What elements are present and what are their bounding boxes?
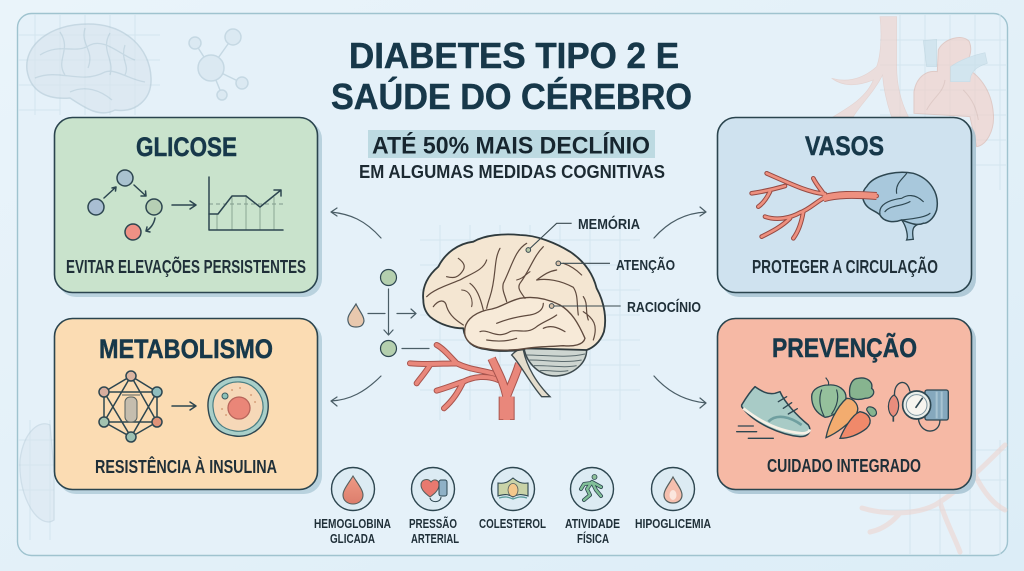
chart: glucose line xyxy=(209,177,285,230)
title xyxy=(331,35,692,117)
decorative faded molecule xyxy=(189,29,248,100)
heading: metabolismo: METABOLISMO xyxy=(99,334,273,364)
icon: atividade fisica xyxy=(570,468,614,510)
icon: hipoglicemia xyxy=(652,468,694,510)
label: atencao: ATENÇÃO xyxy=(616,256,675,274)
panel: glicose xyxy=(54,118,322,297)
icon: vegetables xyxy=(812,378,876,438)
caption: prevencao: CUIDADO INTEGRADO xyxy=(767,456,921,476)
icon: shoe xyxy=(737,387,810,438)
title: SAÚDE DO CÉREBRO xyxy=(331,75,692,117)
arrow: to glicose xyxy=(331,208,381,238)
label: colesterol: COLESTEROL xyxy=(479,516,546,531)
decorative faded heart and vessels, top right xyxy=(832,17,994,147)
cerebellum xyxy=(524,347,587,376)
panel: metabolismo xyxy=(54,318,322,494)
artery xyxy=(410,345,519,420)
icon: pressao arterial xyxy=(412,468,454,510)
title: DIABETES TIPO 2 E xyxy=(349,35,679,76)
pathway diagram xyxy=(348,270,429,356)
decorative faded heart, bottom left xyxy=(20,424,54,522)
label: pressao arterial: ARTERIAL xyxy=(411,531,459,546)
caption: vasos: PROTEGER A CIRCULAÇÃO xyxy=(752,256,938,277)
panel: vasos xyxy=(718,118,976,297)
label: hemoglobina glicada: HEMOGLOBINA xyxy=(314,516,391,531)
icon: glucose cycle xyxy=(88,170,196,240)
panel: prevencao xyxy=(718,318,976,494)
label: hemoglobina glicada xyxy=(314,516,391,546)
subtitle: EM ALGUMAS MEDIDAS COGNITIVAS xyxy=(359,162,665,182)
icon: blood pressure monitor xyxy=(888,382,948,431)
arrow: to vasos xyxy=(654,207,706,238)
label: hemoglobina glicada: GLICADA xyxy=(330,531,375,546)
label: memoria: MEMÓRIA xyxy=(578,215,640,233)
arrow: to metabolismo xyxy=(331,376,381,406)
icon: insulin network xyxy=(99,371,162,442)
decorative faded brain, top left xyxy=(27,24,151,113)
label: pressao arterial: PRESSÃO xyxy=(409,516,457,531)
icon: vessels to brain xyxy=(752,172,937,240)
decorative faded vessels, bottom right xyxy=(862,445,1005,552)
arrow xyxy=(172,402,196,410)
label: hipoglicemia: HIPOGLICEMIA xyxy=(635,516,711,531)
label: raciocinio: RACIOCÍNIO xyxy=(627,299,701,316)
icon: cell xyxy=(208,377,268,436)
caption: metabolismo: RESISTÊNCIA À INSULINA xyxy=(95,456,277,477)
label: pressao arterial xyxy=(409,516,459,546)
heading: vasos: VASOS xyxy=(805,131,884,161)
caption: glicose: EVITAR ELEVAÇÕES PERSISTENTES xyxy=(66,256,306,277)
label: atividade fisica xyxy=(565,516,620,546)
label: atividade fisica: ATIVIDADE xyxy=(565,516,620,531)
icon: colesterol xyxy=(492,468,534,510)
icon row: indicators xyxy=(314,468,711,546)
arrow: to prevencao xyxy=(654,376,706,408)
brain xyxy=(423,234,605,351)
highlighted statistic: ATÉ 50% MAIS DECLÍNIO xyxy=(372,132,650,160)
icon: hemoglobina glicada xyxy=(332,468,374,510)
heading: glicose: GLICOSE xyxy=(136,132,237,162)
brain region markers and leaders xyxy=(526,223,621,308)
label: atividade fisica: FÍSICA xyxy=(577,531,609,546)
brain stem xyxy=(512,349,550,397)
heading: prevencao: PREVENÇÃO xyxy=(772,332,917,363)
